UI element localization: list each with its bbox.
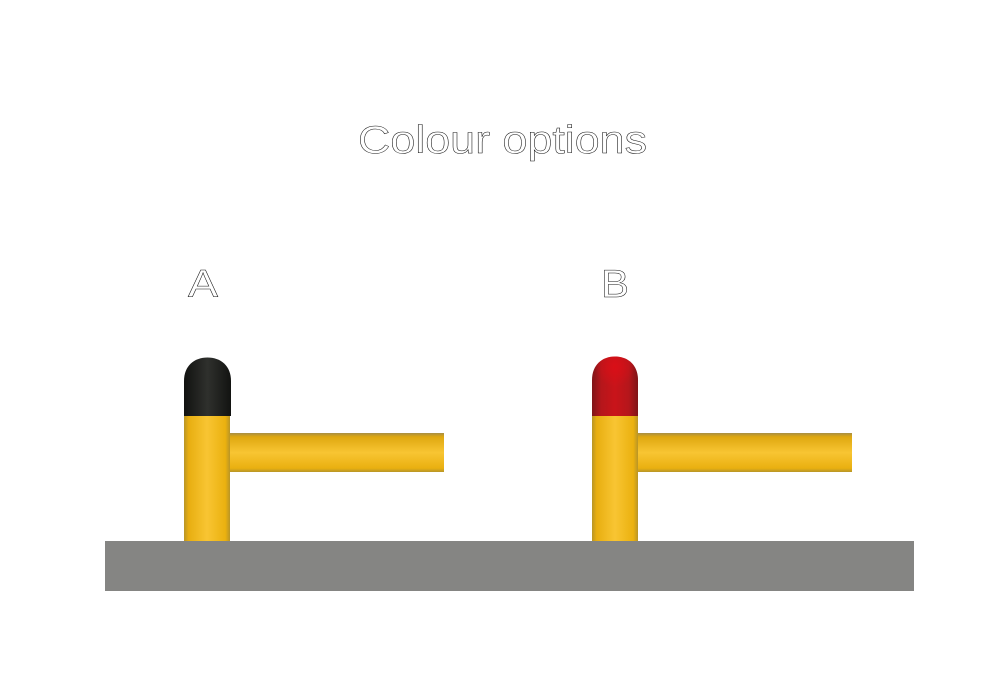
- rail A: [230, 433, 444, 472]
- label: option A: A: [188, 263, 218, 306]
- barrier A: black cap: [184, 358, 444, 542]
- post B: [592, 415, 638, 542]
- title: Colour options: [358, 119, 647, 162]
- cap A: black: [184, 358, 231, 416]
- ground slab: [105, 541, 914, 591]
- barrier B: red cap: [592, 356, 852, 542]
- post A: [184, 415, 230, 542]
- rail B: [638, 433, 852, 472]
- label: option B: B: [601, 263, 629, 306]
- cap B: red: [592, 356, 638, 416]
